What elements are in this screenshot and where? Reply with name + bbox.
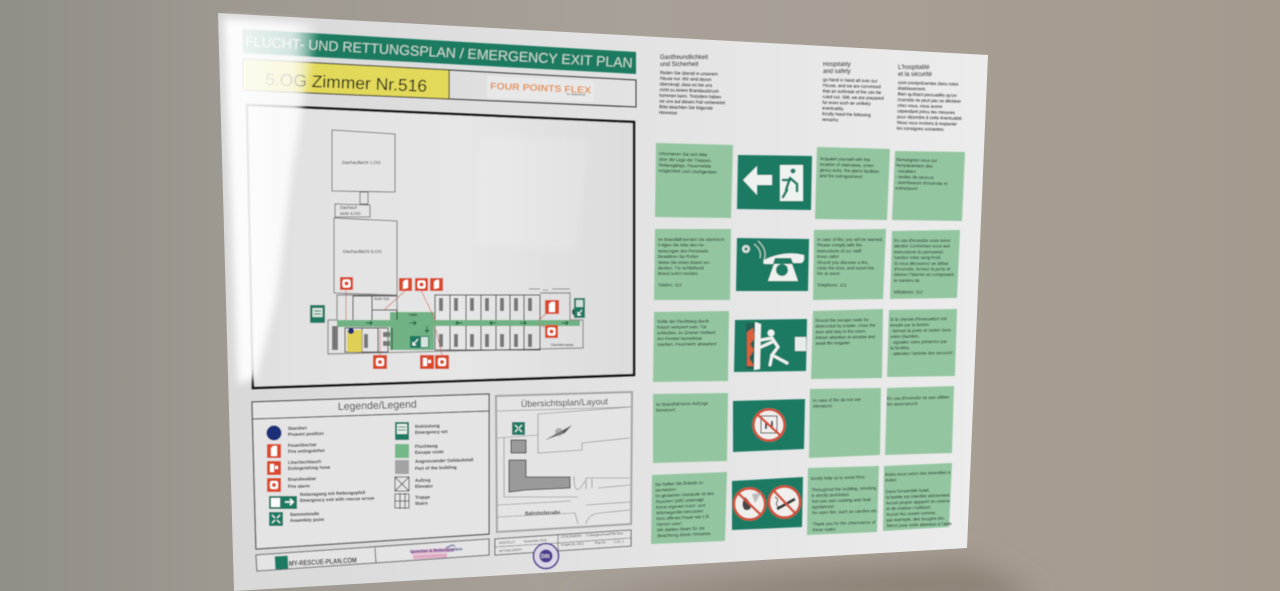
card: French: [890, 230, 960, 299]
legend: emergency set: Emergency set: [415, 429, 448, 435]
card: English: Not use own cooking and heat: [812, 497, 872, 504]
layout: compass arrow: [545, 425, 572, 440]
footer: plan information: November 2018: [524, 538, 547, 543]
card: English: Throughout the building, smoking: [811, 485, 877, 492]
legend: escape route: [395, 443, 444, 458]
icon: exit sign hall: [410, 336, 429, 348]
room fittings: [332, 298, 532, 350]
legend: escape route: Escape route: [415, 449, 444, 455]
labels: 4 m: [543, 288, 549, 292]
legend: elevator: Aufzug: [415, 478, 431, 483]
intro text: French: et la sécurité: [898, 72, 933, 78]
legend: stairs: [395, 493, 431, 509]
intro text: French: les consignes suivantes:: [897, 126, 944, 132]
card: German: Rauch versperrt sein, Tür: [657, 324, 707, 330]
legend: fire alarm: Fire alarm: [288, 483, 310, 489]
legend: emergency exit with rescue arrow: Notausgang mit Rettungspfeil: [300, 490, 365, 497]
card: German: Im gesamten Gebäude ist das: [655, 491, 715, 498]
card: English: obstructed by smoke, close the: [815, 323, 876, 329]
card: French: Dans l'ensemble hotel,: [885, 488, 930, 494]
footer: company logo: [410, 545, 463, 559]
intro text: French: L'hospitalité: [898, 65, 930, 71]
footer: company logo: Sprecher & Rettungspläne: [410, 546, 463, 554]
icon: fire alarm: [340, 277, 353, 290]
card: German: Notausgänge, Feuermelde-: [659, 162, 713, 169]
card: English: Keep calm!: [817, 254, 839, 259]
footer: plan information: ERSTELLT:: [499, 540, 516, 545]
card: English: appliances!: [812, 504, 834, 509]
card: English: Thank you for the observance of: [812, 520, 876, 527]
intro text: English: eventuality.: [822, 105, 844, 111]
icon: fire extinguisher: [545, 300, 559, 314]
card: German: weisungen des Personals.: [658, 248, 709, 253]
legend: fire extinguisher: Fire extinguisher: [288, 448, 325, 454]
card: German: Telefon: 112: [658, 283, 682, 288]
card: English: Please comply with the: [817, 243, 862, 248]
intro text: German: [659, 55, 727, 117]
card: English: No open fire, such as candles etc.: [812, 508, 878, 515]
icon: fire extinguisher: [399, 278, 412, 291]
roof outline: Dachaufsicht 4.OG: Dachauf-: [340, 205, 358, 210]
legend: escape route: Fluchtweg: [415, 443, 438, 449]
card: French: Aidez-nous selon des incendies à: [885, 470, 951, 477]
layout: site lines: [498, 407, 630, 524]
card: German: über die Lage der Treppen,: [659, 157, 712, 163]
footer: certification stamp: [534, 544, 558, 568]
labels: Suite 516: [374, 297, 389, 301]
footer: my-rescue-plan: MY-RESCUE-PLAN.COM: [289, 555, 357, 568]
intro text: French: [897, 65, 964, 132]
footer: plan information: Plan-Nr.: [595, 540, 607, 545]
intro text: German: Hause nur. Wir sind davon: [660, 76, 712, 82]
intro text: English: go hand in hand all over our: [823, 77, 878, 83]
floor plan: [328, 288, 583, 356]
intro text: German: wir uns auf diesen Fall vorbereitet.: [659, 98, 726, 105]
legend: present position: Present position: [288, 431, 324, 437]
intro text: German: überzeugt, dass es bei uns: [660, 81, 713, 88]
roof outline: Dachaufsicht 1.OG: [332, 130, 395, 192]
card: German: [651, 472, 727, 544]
footer: plan information: 5.16_2: [614, 539, 624, 544]
intro text: German: und Sicherheit: [660, 62, 699, 68]
card: German: Kein offenes Feuer wie z.B.: [656, 514, 710, 521]
card: English: [807, 466, 879, 535]
icon: exit sign with arrow: [737, 155, 812, 210]
labels: [374, 288, 574, 347]
card: German: [653, 311, 729, 382]
card: French: En cas d'incendie ne pas utiliser: [887, 394, 950, 401]
card: English: fire at once!: [817, 271, 840, 276]
card: English: [809, 388, 881, 458]
card: English: elevators!: [813, 403, 832, 409]
card: French: par exemple, des bougies etc.: [886, 516, 945, 523]
legend panel: [252, 394, 489, 549]
intro text: German: kommen kann. Trotzdem haben: [659, 93, 722, 99]
card: German: Am Fenster bemerkbar: [657, 336, 703, 341]
card: German: [654, 229, 731, 300]
present position room: [347, 328, 362, 352]
footer: plan information: Projekt-Nr. 2012: [561, 542, 584, 547]
legend: extinguishing hose: Extinguishing hose: [288, 465, 331, 471]
card: English: [815, 147, 890, 220]
card: German: möglichkeit und Löschgeräten: [659, 168, 718, 175]
card: French: le numéro de: [894, 278, 920, 283]
labels: Dachterrasse: [551, 343, 574, 347]
card: German: schließen, im Zimmer bleiben!: [657, 330, 716, 335]
legend: part of the building: [395, 457, 473, 474]
card: German: Brand sofort melden.: [658, 271, 699, 276]
legend: fire alarm: Brandmelder: [288, 476, 317, 482]
card: French: téléphone: 112: [894, 289, 923, 294]
row 1: location of exits: [655, 143, 965, 221]
card: French: [892, 151, 965, 221]
card: German: Wir danken Ihnen für die: [657, 525, 705, 533]
card: German: vermeiden:: [655, 487, 677, 493]
footer: plan information: STOCKWERK:: [561, 534, 583, 539]
card: French: - avertisseurs d'incendie et: [895, 180, 948, 186]
card: English: Telephone: 112: [817, 283, 847, 288]
footer: plan information: [495, 530, 631, 555]
footer: certification stamp: DIN: [541, 554, 550, 560]
intro text: German: nicht zu einem Brandausbruch: [660, 87, 720, 94]
legend: present position: Standort: [288, 425, 307, 431]
outer walls: [328, 293, 583, 354]
row 4: no elevators: [653, 386, 954, 463]
footer: my-rescue-plan: [275, 555, 357, 569]
legend: elevator: [395, 477, 433, 491]
route arrows: [366, 321, 568, 332]
footer: plan information: AKTUALISIERT:: [499, 548, 522, 553]
card: German: Kerzen usw.!: [657, 521, 682, 527]
card: English: Attract attention at window and: [815, 334, 876, 340]
card: English: [813, 229, 886, 300]
legend: part of the building: Part of the building: [415, 465, 457, 471]
logo: Four Points Flex: FOUR POINTS FLEX: [490, 81, 592, 95]
intro text: English: remarks:: [822, 117, 839, 122]
intro text: French: Bien qu'étant persuadés qu'un: [898, 91, 957, 98]
legend: assembly point: Assembly point: [290, 517, 325, 523]
icon: fire alarm: [435, 355, 449, 369]
card: English: In case of fire, you will be warned.: [817, 237, 883, 242]
intro text: English: [822, 62, 885, 123]
card: French: Aucun feu ouvert comme,: [886, 510, 936, 517]
legend: part of the building: Angrenzender Gebäudeteil: [415, 457, 473, 464]
card: English: location of staircases, emer-: [820, 162, 875, 168]
card: French: Gardez votre sang-froid.: [894, 255, 941, 260]
card: French: - escaliers: [896, 168, 917, 174]
card: German: Wenn Sie einen Brand ver-: [658, 260, 711, 265]
card: English: Acquaint yourself with the: [820, 156, 871, 162]
leader lines: [346, 289, 548, 356]
legend: assembly point: Sammelstelle: [290, 511, 320, 517]
roof outline: Dachaufsicht 1.OG: Dachaufsicht 1.OG: [342, 160, 381, 165]
card: English: await fire brigade!: [815, 340, 850, 346]
card: German: Im Brandfall keine Aufzüge: [656, 401, 709, 407]
legend: present position: [266, 425, 324, 440]
card: French: extincteurs!: [895, 185, 918, 191]
intro text: English: that an outbreak of fire can be: [823, 88, 882, 95]
card: French: la fenêtre,: [890, 345, 910, 350]
legend: emergency exit with rescue arrow: [269, 490, 375, 509]
guest rooms: [345, 295, 540, 352]
intro text: German: Reden Sie überall in unserem: [660, 70, 718, 77]
card: French: et de chaleur n'utilisez!: [886, 505, 931, 511]
card: German: [655, 143, 733, 218]
legend: emergency set: Notrüstung: [415, 423, 440, 429]
room banner: [243, 59, 636, 107]
card: French: les ascenseurs!: [887, 401, 918, 407]
card: German: benutzen!: [656, 407, 675, 413]
card: French: d'incendie, fermez la porte et: [894, 266, 951, 272]
legend: stairs: Treppe: [415, 495, 431, 500]
card: English: close the door, and report the: [817, 266, 875, 270]
icon: no open flame and no smoking sign: [732, 477, 803, 530]
card: French: éviter:: [885, 477, 897, 483]
card: French: votre chambre,: [890, 334, 920, 339]
escape routes: [337, 312, 580, 350]
card: German: Keine eigenen Koch- und: [656, 503, 706, 510]
card: French: [885, 386, 954, 455]
icons: fire equipment markers: [310, 277, 585, 369]
intro text: German: Bitte beachten Sie folgende: [659, 104, 713, 111]
card: German: Informieren Sie sich bitte: [659, 151, 708, 157]
card: German: Bewahren Sie Ruhe!: [658, 254, 698, 259]
intro text: German: Hinweise:: [659, 110, 678, 115]
icon: no elevator sign: [733, 399, 805, 452]
card: French: - fermez la porte et restez dans: [890, 327, 952, 333]
card: English: gency exits, fire alarm facilities: [820, 167, 880, 174]
poster sheet: [218, 13, 988, 591]
card: French: donnez l'alarme en composant: [894, 272, 954, 277]
card: French: [883, 463, 953, 531]
card: German: Beachtung dieser Hinweise.: [657, 531, 712, 538]
icon: fire alarm: [545, 325, 558, 338]
layout title: Übersichtsplan/Layout: [521, 396, 609, 409]
card: English: and fire extinguishers!: [820, 173, 863, 179]
icon: extinguishing hose: [420, 355, 434, 369]
roof outline: Dachaufsicht 4.OG: [335, 192, 370, 217]
legend: fire alarm: [267, 476, 317, 492]
intro text: French: cependant prévu les mesures: [897, 108, 956, 115]
card: French: Renseignez-vous sur: [896, 157, 938, 163]
intro text: German: Gastfreundlichkeit: [660, 55, 708, 61]
intro text: French: sont omniprésentes dans notre: [898, 80, 959, 87]
card: German: [653, 393, 728, 463]
intro text: English: House, and we are convinced: [823, 83, 881, 89]
legend: extinguishing hose: Löschschlauch: [288, 459, 322, 465]
logo: Four Points Flex: [487, 76, 594, 102]
intro text: French: chez nous, nous avons: [897, 103, 943, 109]
intro text: English: Kindly heed the following: [822, 111, 871, 117]
card: German: Sollte der Fluchtweg durch: [657, 319, 710, 324]
legend: emergency exit with rescue arrow: Emergency exit with rescue arrow: [300, 496, 375, 503]
legend title: Legende/Legend: [338, 399, 417, 413]
row 2: fire alarm and telephone: [654, 229, 960, 300]
card: French: Si vous découvrez un début: [894, 261, 949, 266]
card: French: la fumée est interdite strictement.: [886, 493, 950, 500]
card: English: these notes.: [812, 527, 837, 532]
card: French: En cas d'incendie vous serez: [894, 238, 951, 243]
card: German: Im Brandfall werden Sie alarmiert!: [658, 237, 724, 242]
card: French: l'emplacement des:: [896, 163, 934, 169]
legend: stairs: Stairs: [415, 501, 428, 506]
card: German: decken, Tür schließend: [658, 266, 704, 270]
icon: fire alarm: [373, 355, 387, 369]
card: French: Merci pour votre attention à l'aide: [887, 521, 952, 528]
intro text: English: ruled out. Still, we are prepared: [823, 94, 884, 101]
icon: fire extinguisher: [430, 278, 443, 291]
card: French: [887, 309, 957, 377]
legend: elevator: Elevator: [415, 483, 433, 489]
layout: building: [509, 440, 570, 492]
row 3: blocked escape route: [653, 309, 957, 382]
row 5: fire prevention: [651, 463, 953, 544]
card: English: [811, 309, 883, 379]
roof outline: Dachaufsicht 5.OG: Dachaufsicht 5.OG: [343, 249, 382, 254]
icon: telephone sign: [736, 238, 809, 291]
layout overview panel: [496, 392, 632, 532]
intro text: French: établissement.: [898, 86, 926, 91]
floor plan frame: [247, 105, 634, 388]
card: English: Should the escape route be: [815, 317, 869, 323]
logo: Four Points Flex: BY SHERATON: [567, 92, 586, 97]
room banner: 5.OG Zimmer Nr.516: [265, 70, 427, 96]
intro text: English: Hospitality: [823, 62, 851, 68]
legend: fire extinguisher: Feuerlöscher: [288, 442, 317, 448]
intro text: French: incendie ne peut pas se déclarer: [898, 97, 962, 104]
intro text: English: for even such an unlikely: [822, 100, 872, 106]
layout: street name: Bahnhofstraße: [525, 510, 561, 517]
card: English: In case of fire do not use: [813, 397, 862, 403]
footer: logos: [256, 539, 489, 571]
footer: plan information: 5.Obergeschoss/Fifth floor: [586, 531, 624, 537]
card: French: alertés! Conformez-vous aux: [894, 244, 951, 249]
title band: FLUCHT- UND RETTUNGSPLAN / EMERGENCY EXIT PLAN: [245, 33, 633, 71]
intro text: French: pour répondre à cette éventualité.: [897, 114, 963, 121]
card: German: Rauchen (still) untersagt.: [656, 497, 705, 504]
intro text: French: Nous vous invitons à respecter: [897, 120, 958, 126]
card: English: door and stay in the room.: [815, 329, 866, 334]
labels: Halle: [409, 313, 417, 317]
card: English: is strictly prohibited.: [811, 492, 850, 498]
card: French: Si le chemin d'évacuation est: [890, 316, 948, 322]
roof outline: Dachaufsicht 5.OG: [334, 218, 397, 295]
icon: no smoking: [769, 486, 800, 518]
icon: fire alarm: [415, 278, 428, 291]
card: English: Should you discover a fire,: [817, 260, 869, 265]
legend: fire extinguisher: [267, 442, 325, 458]
icon: exit sign east: [572, 298, 585, 318]
card: German: machen, Feuerwehr abwarten!: [657, 341, 717, 347]
icon: emergency set: [310, 305, 325, 323]
card: French: - sorties de secours: [896, 174, 935, 180]
card: French: - attendez l'arrivée des secours!: [891, 350, 953, 356]
layout: assembly point icon: [512, 422, 525, 435]
legend: emergency set: [395, 422, 448, 440]
card: German: Folgen Sie bitte den An-: [658, 243, 705, 248]
icon: no open flame: [734, 488, 765, 520]
legend: extinguishing hose: [267, 459, 331, 475]
card: English: Kindly help us to avoid fires:: [811, 474, 866, 481]
glare on glossy sheet: [224, 18, 590, 384]
legend: assembly point: [269, 511, 325, 526]
intro text: English: and safety: [823, 69, 851, 75]
card: French: envahi par la fumée:: [890, 322, 930, 328]
card: French: - signalez votre présence par: [890, 339, 948, 345]
card: German: Wärmegeräte benutzen!: [656, 508, 703, 515]
card: German: Sie helfen Sie Brände zu: [655, 480, 704, 487]
roof outline: Dachaufsicht 4.OG: sicht 4.OG: [340, 211, 361, 216]
card: English: instructions of our staff.: [817, 248, 862, 253]
icon: person closing door against fire: [734, 319, 807, 372]
card: French: Aucun propre appareil de cuisine: [886, 498, 951, 505]
card: French: instructions du personnel.: [894, 249, 944, 254]
